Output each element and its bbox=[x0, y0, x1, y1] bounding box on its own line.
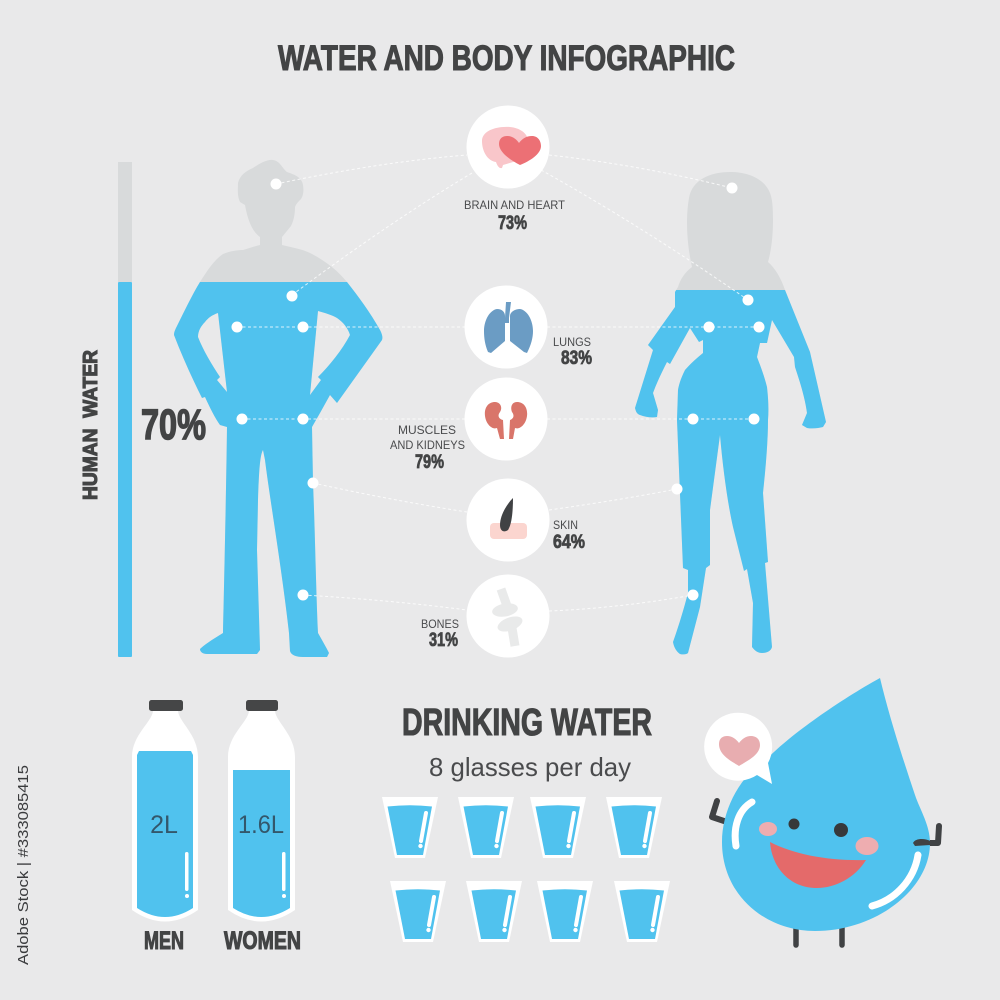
bottle: women: 1.6L bbox=[238, 811, 284, 839]
male body markers bbox=[232, 178, 318, 600]
label: bones: 31% bbox=[429, 629, 458, 651]
image credit: Adobe Stock | #333085415 bbox=[15, 765, 32, 965]
gauge water level bbox=[118, 282, 132, 657]
human water gauge bbox=[118, 162, 132, 657]
mascot face bbox=[759, 818, 878, 888]
label: skin: 64% bbox=[553, 531, 585, 553]
speech bubble with heart bbox=[704, 713, 772, 784]
label: skin bbox=[553, 518, 585, 553]
label: muscles and kidneys: MUSCLES bbox=[398, 423, 456, 437]
label: bones: BONES bbox=[421, 617, 459, 631]
gauge label: HUMAN WATER bbox=[80, 349, 102, 500]
mascot body bbox=[722, 678, 930, 931]
icon: brain and heart bbox=[466, 106, 550, 188]
label: brain and heart bbox=[464, 198, 566, 234]
glasses grid bbox=[382, 797, 670, 942]
connector lines bbox=[237, 155, 759, 611]
male silhouette bbox=[174, 160, 382, 657]
label: lungs: 83% bbox=[561, 347, 592, 369]
icon: skin bbox=[466, 478, 550, 562]
female silhouette bbox=[635, 172, 826, 654]
icon: kidneys bbox=[464, 378, 548, 460]
mascot legs bbox=[796, 925, 842, 945]
mascot highlights bbox=[735, 802, 918, 906]
label: men: MEN bbox=[144, 927, 184, 955]
water drop mascot bbox=[704, 678, 939, 945]
label: bones bbox=[421, 617, 459, 651]
icon: bones bbox=[466, 574, 550, 658]
label: brain and heart: BRAIN AND HEART bbox=[464, 198, 566, 212]
bottle: women bbox=[228, 700, 295, 922]
gauge empty part bbox=[118, 162, 132, 282]
label: muscles and kidneys bbox=[390, 423, 465, 473]
glasses per day subheading: 8 glasses per day bbox=[429, 752, 631, 782]
bottle: men: 2L bbox=[150, 811, 178, 839]
female body markers bbox=[672, 182, 764, 600]
drinking water heading: DRINKING WATER bbox=[402, 702, 652, 744]
bottle: men bbox=[132, 700, 198, 922]
label: muscles and kidneys: 79% bbox=[415, 451, 444, 473]
label: skin: SKIN bbox=[553, 518, 578, 532]
label: lungs bbox=[553, 335, 592, 369]
human water percentage: 70% bbox=[141, 401, 206, 449]
label: muscles and kidneys: AND KIDNEYS bbox=[390, 438, 465, 452]
label: brain and heart: 73% bbox=[498, 212, 527, 234]
title: WATER AND BODY INFOGRAPHIC bbox=[278, 39, 735, 78]
mascot arms bbox=[712, 801, 939, 843]
label: women: WOMEN bbox=[224, 927, 301, 955]
icon: lungs bbox=[464, 286, 548, 368]
label: lungs: LUNGS bbox=[553, 335, 591, 349]
